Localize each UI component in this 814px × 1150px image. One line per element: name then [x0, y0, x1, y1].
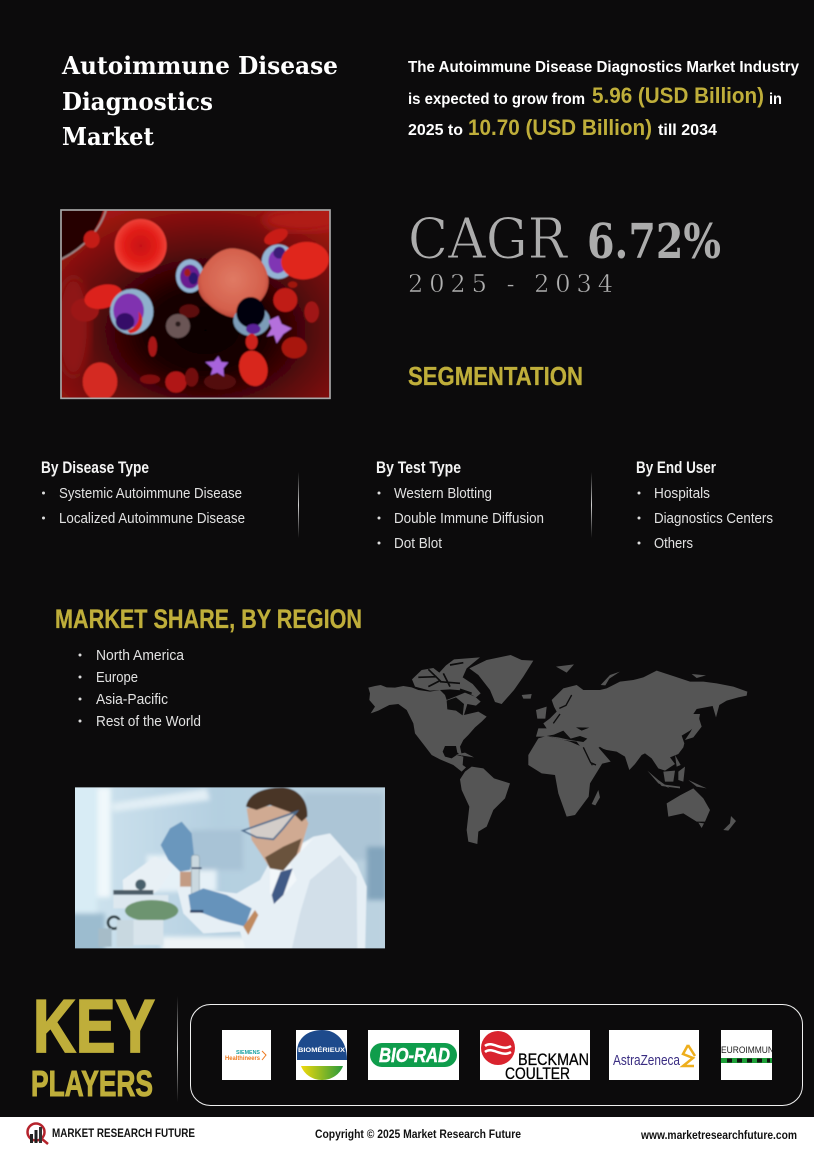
africa: [528, 736, 602, 817]
dark corner cell: [62, 210, 104, 259]
australia: [667, 788, 710, 822]
immune cell centre: [176, 259, 204, 293]
market growth summary: The Autoimmune Disease Diagnostics Market Industry: [408, 59, 799, 76]
logo: siemens healthineers: SIEMENS: [236, 1050, 260, 1056]
logo: siemens healthineers: [222, 1030, 271, 1080]
title: Diagnostics: [62, 87, 213, 116]
logo: astrazeneca: AstraZeneca: [613, 1052, 681, 1069]
region list: Europe: [96, 669, 138, 686]
image: scientist in laboratory: [75, 787, 385, 948]
lab coat: [177, 833, 367, 957]
segment: by test type: By Test Type: [376, 459, 461, 477]
logo: siemens healthineers: Healthineers: [225, 1056, 261, 1062]
market growth summary: 5.96 (USD Billion): [592, 83, 764, 108]
market growth summary: 10.70 (USD Billion): [468, 115, 652, 140]
title: Market: [62, 122, 155, 151]
plant: [125, 900, 178, 921]
segment: by test type: [376, 459, 544, 552]
logo: beckman coulter: BECKMAN: [518, 1050, 589, 1069]
logo: beckman coulter: [480, 1030, 590, 1083]
islands: [536, 707, 547, 719]
logo: bio-rad: [368, 1030, 459, 1080]
market growth summary: 2025 to: [408, 122, 463, 139]
region list: Rest of the World: [96, 713, 201, 730]
caribbean islands: [456, 753, 474, 757]
CAGR figure: CAGR: [408, 207, 569, 272]
small red cells: [273, 288, 297, 312]
logo: market research future: MARKET RESEARCH FUTURE: [52, 1126, 195, 1140]
segment: by test type: Western Blotting: [394, 485, 492, 502]
segment: by end user: Others: [654, 535, 693, 552]
market growth summary: till 2034: [658, 122, 717, 139]
logo: biomerieux: [296, 1030, 347, 1080]
CAGR figure: 6.72%: [587, 214, 721, 270]
microscope: [122, 862, 158, 893]
key players panel: [190, 1004, 802, 1106]
footer bar: Copyright © 2025 Market Research Future: [315, 1127, 521, 1141]
lower right immune cell: [233, 305, 270, 336]
segment: by end user: Diagnostics Centers: [654, 510, 773, 527]
arctic channels: [418, 663, 472, 693]
segment: by end user: Hospitals: [654, 485, 710, 502]
segment: by end user: By End User: [636, 459, 716, 477]
segment: by disease type: Systemic Autoimmune Disease: [59, 485, 242, 502]
logo: bio-rad: BIO-RAD: [379, 1045, 450, 1067]
segment: by end user: [636, 459, 773, 552]
south america: [460, 767, 510, 844]
tumour cell: [198, 248, 268, 318]
immune cell left: [110, 289, 153, 334]
image: blood cells: [60, 209, 331, 400]
market growth summary: is expected to grow from: [408, 91, 585, 108]
segment: by test type: Double Immune Diffusion: [394, 510, 544, 527]
lower gloved hand: [188, 888, 252, 927]
heading: segmentation: SEGMENTATION: [408, 361, 583, 391]
market growth summary: in: [769, 91, 782, 108]
eurasia: [536, 671, 747, 771]
arctic islands: [412, 657, 481, 697]
hudson bay: [447, 697, 464, 715]
grey cell: [166, 314, 190, 338]
logo: euroimmun: EUROIMMUN: [721, 1045, 774, 1055]
logo: beckman coulter: COULTER: [505, 1064, 570, 1083]
region list: [78, 647, 201, 730]
lab background: [75, 788, 385, 948]
footer bar: [0, 1117, 814, 1150]
immune cell upper right: [262, 244, 295, 279]
tie: [272, 868, 293, 904]
title: [61, 51, 338, 151]
region list: North America: [96, 647, 185, 664]
title: Autoimmune Disease: [61, 51, 338, 80]
safety goggles: [243, 812, 297, 839]
market growth summary: [408, 59, 799, 140]
segment: by disease type: Localized Autoimmune Disease: [59, 510, 245, 527]
segment: by disease type: By Disease Type: [41, 459, 149, 477]
hair: [246, 787, 307, 822]
test tube: [191, 855, 199, 912]
greenland: [469, 655, 533, 704]
bench items: [108, 917, 120, 929]
world map: [368, 655, 747, 844]
logo: market research future: [28, 1124, 195, 1144]
purple platelets: [267, 316, 292, 343]
CAGR figure: [408, 207, 721, 298]
segment: by test type: Dot Blot: [394, 535, 443, 552]
CAGR figure: 2025 - 2034: [408, 270, 613, 298]
heading: market share by region: MARKET SHARE, BY REGION: [55, 604, 362, 634]
key players heading: PLAYERS: [31, 1063, 153, 1104]
segment: by disease type: [41, 459, 245, 527]
logo: euroimmun: [721, 1030, 774, 1080]
region list: Asia-Pacific: [96, 691, 168, 708]
north america: [368, 685, 487, 772]
logo: biomerieux: BIOMÉRIEUX: [298, 1045, 346, 1054]
seas: [547, 727, 589, 742]
neck and face: [247, 803, 308, 870]
upper gloved hand: [161, 822, 194, 872]
logo: astrazeneca: [609, 1030, 699, 1080]
key players heading: [31, 984, 155, 1104]
key players heading: KEY: [33, 984, 155, 1068]
